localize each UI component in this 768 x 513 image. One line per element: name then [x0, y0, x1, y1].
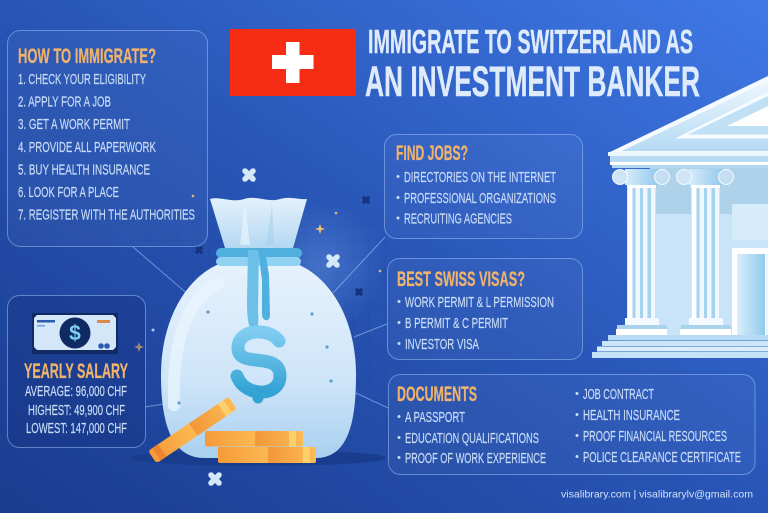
icon: banknote: $ — [69, 322, 81, 345]
job sources list — [396, 169, 556, 228]
dollar sign — [237, 332, 280, 392]
documents list left: EDUCATION QUALIFICATIONS — [405, 430, 539, 447]
icon: banknote — [32, 313, 118, 354]
heading: best swiss visas: BEST SWISS VISAS? — [397, 268, 525, 291]
visas list: INVESTOR VISA — [405, 336, 479, 353]
job sources list: DIRECTORIES ON THE INTERNET — [404, 169, 556, 186]
job sources list: PROFESSIONAL ORGANIZATIONS — [404, 190, 556, 207]
heading: find jobs: FIND JOBS? — [396, 142, 468, 165]
illustration: money bag — [161, 198, 356, 458]
steps list: 7. REGISTER WITH THE AUTHORITIES — [18, 206, 195, 224]
visas list: WORK PERMIT & L PERMISSION — [405, 294, 554, 311]
title — [365, 23, 700, 106]
documents list right: JOB CONTRACT — [583, 386, 654, 403]
documents list left: A PASSPORT — [405, 409, 465, 426]
job sources list: RECRUITING AGENCIES — [404, 210, 512, 228]
steps — [592, 335, 768, 358]
steps list: 6. LOOK FOR A PLACE — [18, 184, 119, 201]
salary figures: LOWEST: 147,000 CHF — [26, 420, 127, 437]
heading: yearly salary: YEARLY SALARY — [24, 360, 128, 383]
flag of Switzerland — [230, 29, 356, 96]
heading: how to immigrate: HOW TO IMMIGRATE? — [18, 45, 156, 68]
salary figures: AVERAGE: 96,000 CHF — [25, 383, 127, 400]
steps list: 4. PROVIDE ALL PAPERWORK — [18, 139, 156, 156]
steps list — [18, 71, 195, 224]
documents list right: HEALTH INSURANCE — [583, 407, 680, 424]
pediment — [608, 76, 768, 155]
gold coins — [148, 397, 316, 463]
ground shadow — [130, 450, 386, 466]
documents list right — [576, 386, 741, 466]
illustration: bank building — [592, 76, 768, 358]
footer contact: visalibrary.com | visalibrarylv@gmail.com — [561, 488, 753, 500]
column right — [676, 169, 734, 335]
salary figures — [25, 383, 127, 437]
steps list: 5. BUY HEALTH INSURANCE — [18, 162, 150, 178]
salary figures: HIGHEST: 49,900 CHF — [28, 402, 125, 419]
bag tie — [216, 248, 302, 330]
steps list: 1. CHECK YOUR ELIGIBILITY — [18, 71, 146, 88]
connector lines — [133, 237, 388, 408]
panel: best swiss visas — [388, 258, 582, 360]
steps list: 2. APPLY FOR A JOB — [18, 94, 111, 110]
visas list: B PERMIT & C PERMIT — [405, 315, 508, 332]
steps list: 3. GET A WORK PERMIT — [18, 116, 130, 133]
panel: documents — [388, 374, 755, 474]
bag body — [161, 264, 356, 458]
panel: find jobs — [384, 134, 582, 238]
bag top cloth — [210, 198, 307, 248]
entablature — [608, 152, 768, 168]
panel: yearly salary — [8, 296, 146, 448]
building wall — [650, 168, 768, 336]
visas list — [398, 294, 554, 353]
column left — [612, 169, 670, 335]
panel: how to immigrate — [8, 30, 208, 246]
heading: documents: DOCUMENTS — [397, 383, 477, 406]
decorative marks — [134, 171, 381, 483]
documents list left: PROOF OF WORK EXPERIENCE — [405, 450, 546, 467]
door — [732, 248, 768, 336]
documents list left — [398, 409, 546, 467]
